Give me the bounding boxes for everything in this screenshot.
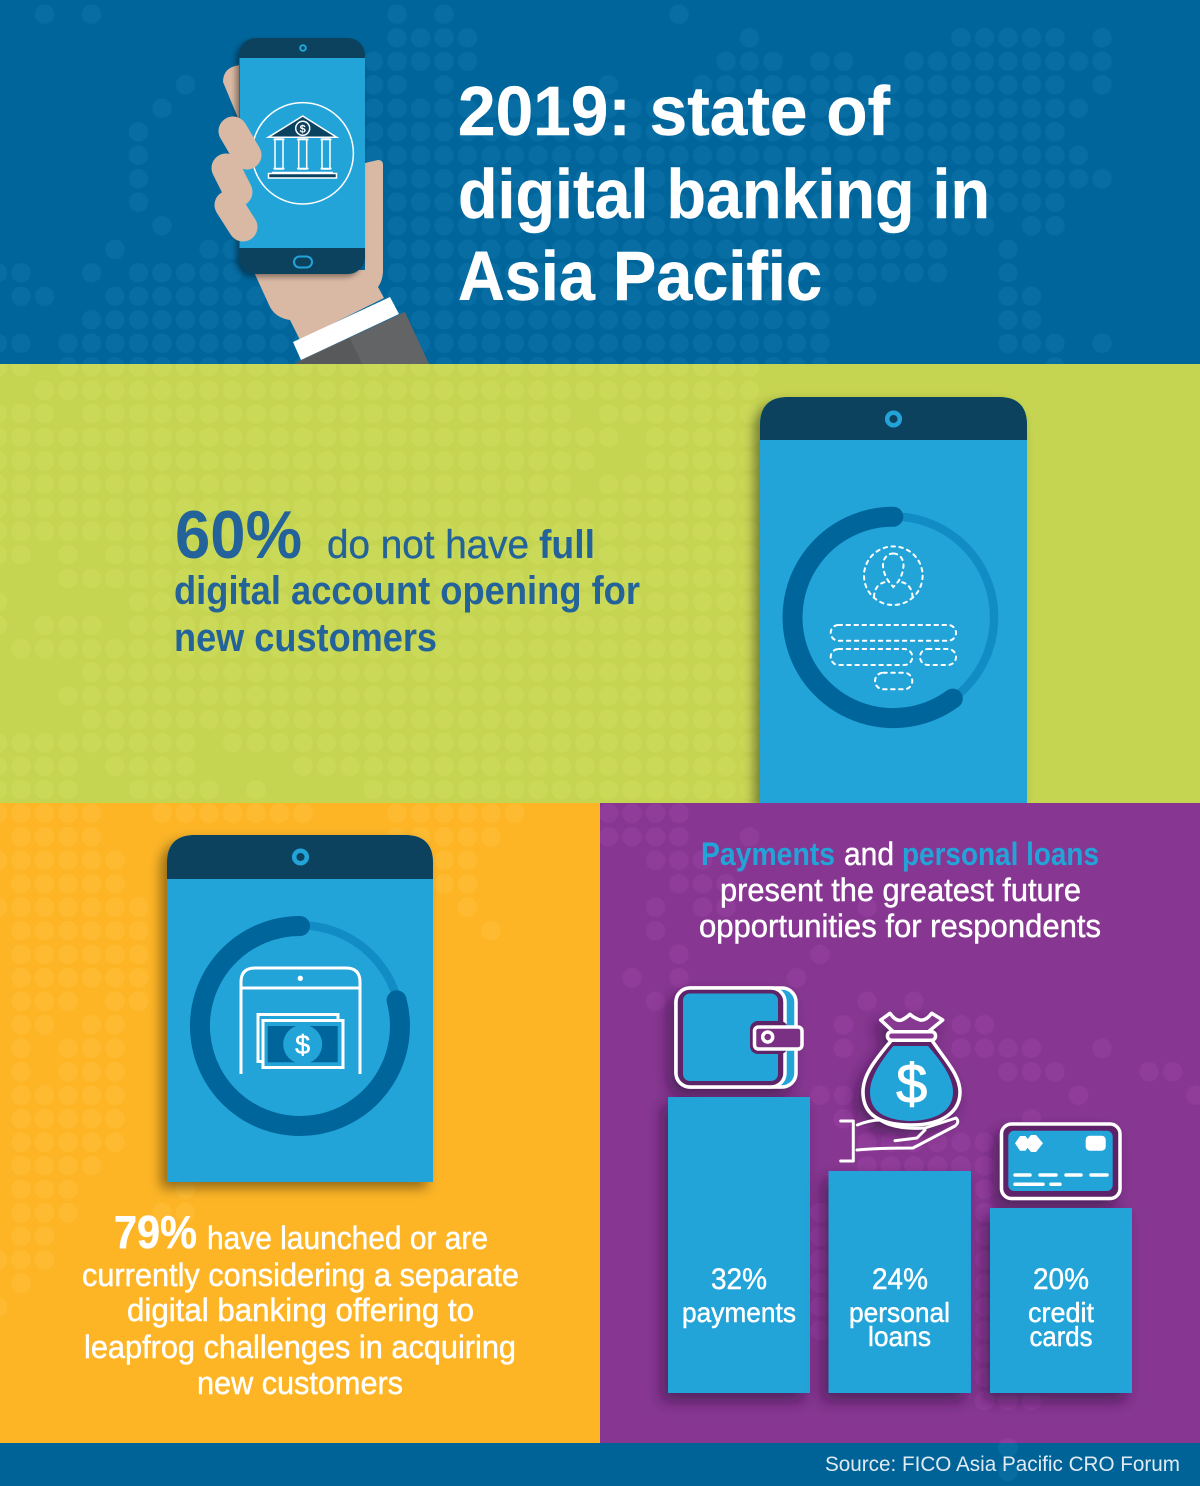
heading: opportunities: and bbox=[844, 836, 894, 872]
icon: phone outline bbox=[241, 968, 360, 1074]
icon: money bag on hand bbox=[841, 1013, 960, 1161]
text: 60 percent statistic: full bbox=[539, 523, 595, 567]
icon: open hand bbox=[841, 1118, 958, 1161]
bar: 20 percent credit cards bbox=[990, 1208, 1132, 1393]
footer: source bbox=[826, 1456, 1179, 1471]
icon: phone body bbox=[760, 397, 1027, 803]
panel: 79 percent separate digital offering bbox=[0, 802, 600, 1443]
icon: phone body bbox=[167, 835, 433, 1182]
text: 79 percent statistic: have launched or are bbox=[207, 1220, 488, 1256]
title: digital banking in bbox=[458, 155, 990, 233]
icon: bank bbox=[252, 103, 353, 204]
bar: 24 percent personal loans bbox=[828, 1171, 971, 1393]
icon: money bag: $ bbox=[896, 1052, 927, 1115]
icon: credit card bbox=[1002, 1124, 1120, 1198]
text: 79 percent statistic: 79% bbox=[114, 1206, 197, 1258]
text: 79 percent statistic: new customers bbox=[197, 1365, 403, 1401]
icon: wallet bbox=[676, 988, 802, 1087]
heading: opportunities: personal loans bbox=[902, 836, 1099, 872]
icon: banknotes bbox=[258, 1014, 343, 1068]
bar: 24 percent personal loans: 24% bbox=[872, 1263, 928, 1296]
icon: money bag bbox=[863, 1013, 960, 1125]
text: 60 percent statistic bbox=[174, 497, 640, 660]
icon: large phone with account form bbox=[760, 397, 1027, 803]
icon: suit sleeve bbox=[295, 312, 429, 364]
text: 79 percent statistic: digital banking offering to bbox=[127, 1292, 474, 1328]
icon: phone with cash bbox=[167, 835, 433, 1182]
text: 60 percent statistic: 60% bbox=[175, 497, 302, 573]
heading: opportunities: Payments bbox=[701, 836, 835, 872]
icon: phone body bbox=[239, 38, 365, 274]
footer: source: Source: FICO Asia Pacific CRO Forum bbox=[825, 1453, 1180, 1476]
panel: header bbox=[0, 5, 1111, 364]
chart: 60 percent ring bbox=[792, 516, 994, 718]
bar: 20 percent credit cards: cards bbox=[1030, 1321, 1092, 1352]
icon: shirt cuff bbox=[293, 297, 399, 360]
text: 60 percent statistic: do not have bbox=[327, 523, 529, 567]
icon: bank: $ bbox=[300, 124, 306, 136]
chart: 79 percent ring bbox=[199, 925, 401, 1127]
icon: hand holding phone bbox=[223, 38, 429, 364]
bar: 24 percent personal loans: personal bbox=[849, 1297, 950, 1328]
text: 60 percent statistic: digital account opening for bbox=[174, 569, 640, 613]
text: 79 percent statistic bbox=[82, 1206, 519, 1401]
text: 79 percent statistic: leapfrog challenges in acquiring bbox=[84, 1329, 516, 1365]
title: 2019: state of bbox=[458, 72, 891, 150]
bar: 32 percent payments bbox=[668, 1097, 810, 1393]
heading: opportunities: present the greatest future bbox=[720, 872, 1081, 908]
panel: future opportunities bbox=[597, 802, 1200, 1460]
icon: fingers bbox=[226, 131, 247, 227]
bar: 24 percent personal loans: loans bbox=[868, 1321, 931, 1352]
text: 79 percent statistic: currently considering a separate bbox=[82, 1257, 519, 1293]
panel: 60 percent digital account opening bbox=[0, 355, 1200, 803]
icon: thumb and palm bbox=[223, 65, 384, 340]
title bbox=[458, 72, 990, 315]
bar: 32 percent payments: payments bbox=[682, 1297, 796, 1328]
title: Asia Pacific bbox=[458, 237, 822, 315]
icon: banknotes: $ bbox=[295, 1030, 310, 1060]
bar: 20 percent credit cards: credit bbox=[1028, 1297, 1094, 1328]
bar: 20 percent credit cards: 20% bbox=[1033, 1263, 1089, 1296]
heading: opportunities bbox=[699, 836, 1101, 944]
icon: dashed user and form fields bbox=[831, 546, 956, 689]
bar: 32 percent payments: 32% bbox=[711, 1263, 767, 1296]
heading: opportunities: opportunities for respondents bbox=[699, 908, 1101, 944]
text: 60 percent statistic: new customers bbox=[174, 616, 437, 660]
